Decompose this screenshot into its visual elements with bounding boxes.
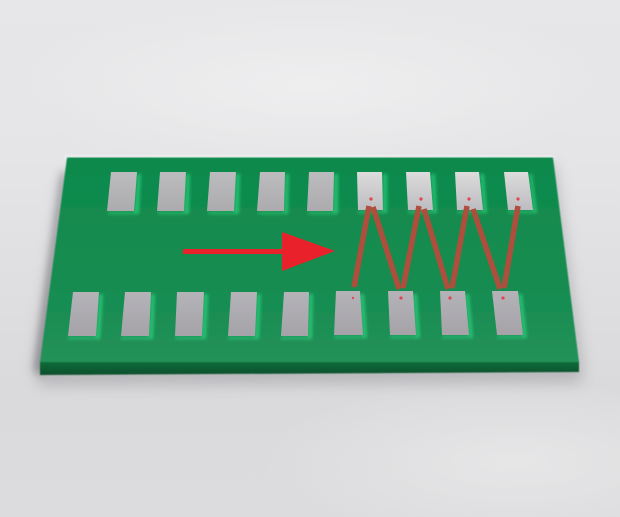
pad: [228, 292, 257, 336]
pad: [357, 172, 383, 210]
pad: [455, 172, 483, 210]
pad: [107, 172, 137, 211]
board shadow: [34, 165, 582, 386]
board top surface: [40, 158, 579, 362]
pad: [440, 291, 469, 335]
pad: [207, 172, 236, 211]
pad: [68, 292, 99, 336]
highlight rim along the back edge: [65, 156, 554, 159]
pad: [492, 291, 523, 335]
pad: [334, 291, 363, 335]
top row pads: [107, 172, 537, 214]
pad: [504, 172, 533, 210]
pad: [157, 172, 186, 211]
board: [40, 158, 579, 375]
pad: [281, 292, 309, 336]
board front edge: [40, 361, 579, 375]
bottom row pads: [68, 291, 527, 339]
pad: [307, 172, 334, 211]
trace contact dots: [352, 197, 520, 300]
arrow: direction of travel: [183, 232, 335, 271]
pad: [257, 172, 285, 211]
pad: [406, 172, 433, 210]
pad: [175, 292, 204, 336]
pad: [388, 291, 416, 335]
zigzag trace: [354, 206, 518, 289]
pad: [121, 292, 151, 336]
